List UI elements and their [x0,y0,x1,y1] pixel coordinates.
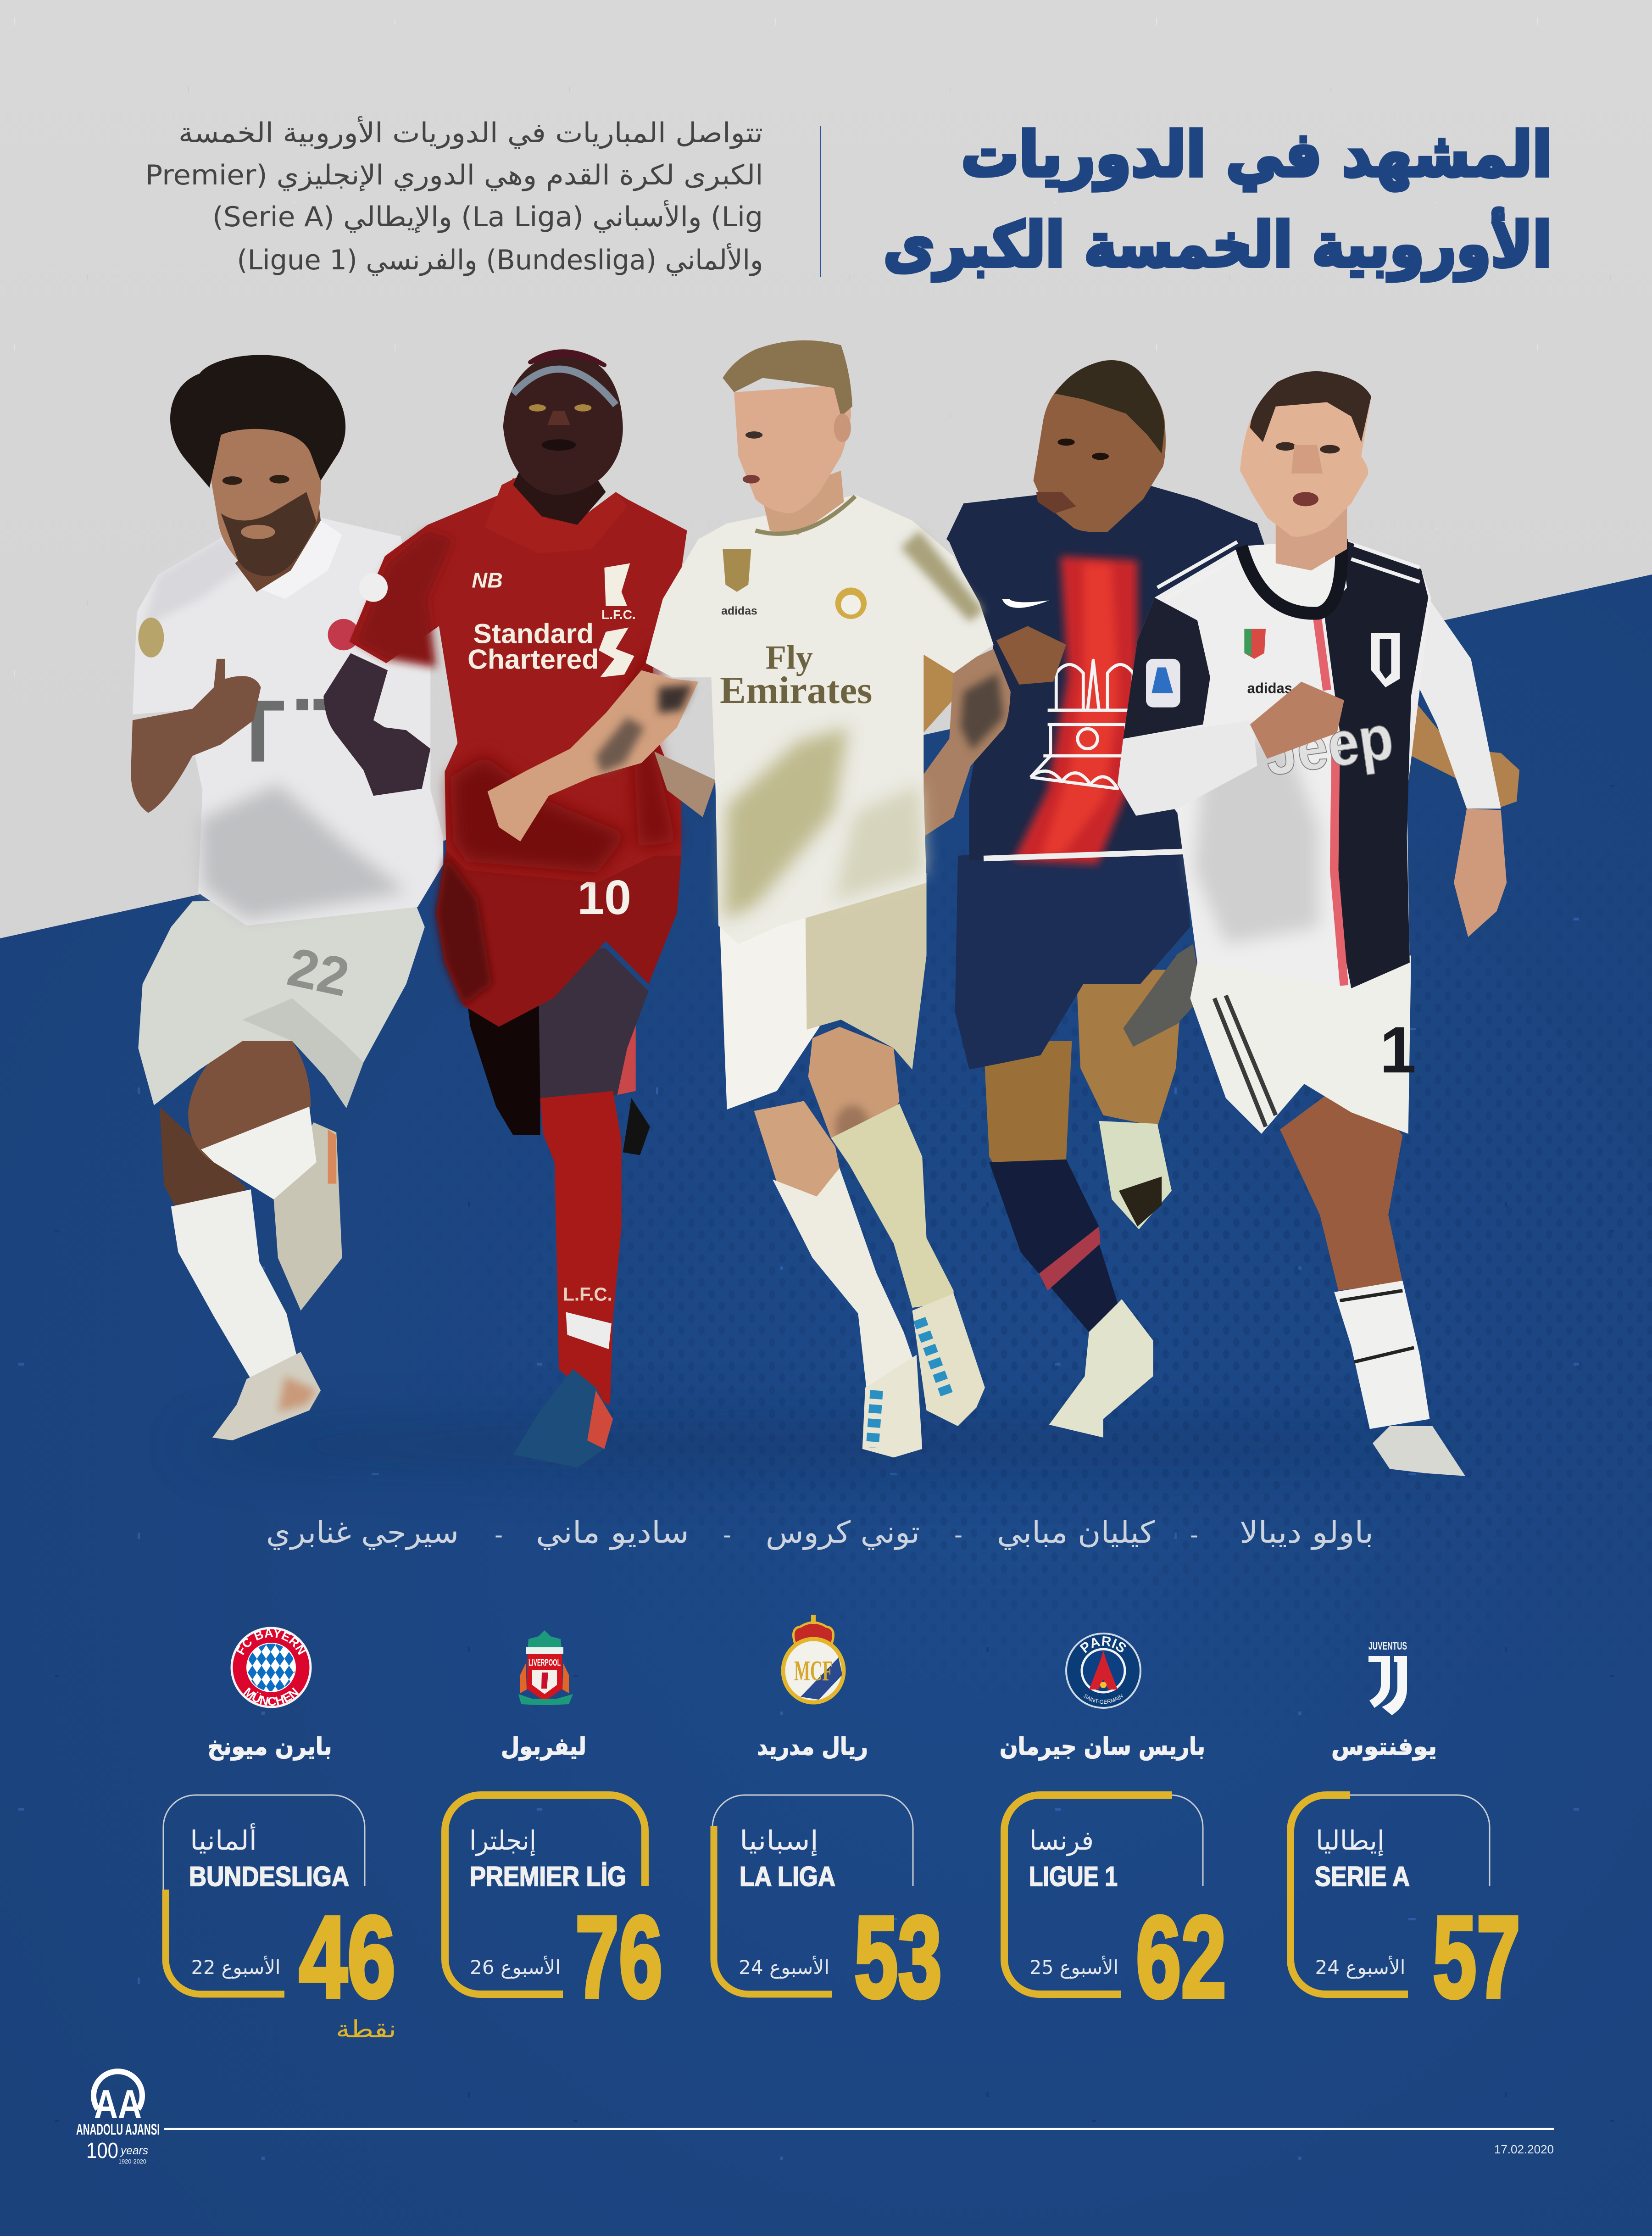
title [884,119,1552,281]
crest: Paris Saint-Germain: SAINT-GERMAIN [1082,1693,1124,1705]
player: Toni Kroos: Emirates [720,669,872,712]
card: La Liga: إسبانيا [740,1825,818,1857]
card: Premier League: PREMIER LİG [470,1861,626,1892]
club names: باريس سان جيرمان [1000,1733,1205,1761]
background: grey paper grain [0,0,1652,941]
player names [266,1515,1374,1550]
card: Bundesliga: 46 [299,1893,395,2022]
logo: Anadolu Agency [76,2069,160,2165]
card: Serie A: الأسبوع 24 [1315,1955,1406,1979]
title: المشهد في الدوريات [961,119,1552,191]
player: Toni Kroos: Fly [765,639,813,677]
club names: يوفنتوس [1331,1733,1437,1761]
player: Sadio Mane: Chartered [467,644,599,675]
intro text: Lig) والأسباني (La Liga) والإيطالي (Serie A) [212,200,763,233]
player: Paulo Dybala [1118,371,1507,1476]
club names: ليفربول [501,1733,586,1761]
card: La Liga: الأسبوع 24 [739,1955,829,1979]
player: Sadio Mane: 10 [577,870,631,925]
player: Serge Gnabry [131,355,443,1440]
club names: بايرن ميونخ [207,1733,332,1761]
player names: ساديو ماني [536,1515,689,1550]
card: Premier League: 76 [575,1893,662,2022]
crest: Bayern Munich: FC BAYERN [234,1626,309,1657]
player: Sadio Mane: L.F.C. [601,608,636,622]
club names: ريال مدريد [757,1733,868,1761]
player: Sadio Mane: NB [472,568,503,592]
player names: كيليان مبابي [997,1515,1155,1550]
card: Bundesliga [163,1795,396,2043]
crest: Juventus: JUVENTUS [1368,1640,1407,1652]
player names: - [1190,1522,1198,1548]
player: Sadio Mane: Standard [473,618,594,649]
player: Kylian Mbappe [919,360,1519,1438]
card: Ligue 1: LIGUE 1 [1029,1861,1118,1892]
card: Ligue 1 [1004,1795,1226,2022]
card: Bundesliga: ألمانيا [190,1823,257,1856]
crest: Bayern Munich [232,1626,311,1708]
player: Serge Gnabry: 22 [283,937,354,1008]
player: Paulo Dybala: Jeep [1261,701,1397,789]
player names: - [954,1522,962,1548]
player: Toni Kroos: adidas [721,605,757,618]
player group [131,340,1519,1476]
crest: Bayern Munich: MÜNCHEN [241,1685,301,1708]
title divider [820,126,821,277]
date: 17.02.2020 [1494,2142,1554,2156]
card: Ligue 1: فرنسا [1029,1825,1094,1857]
footer rule [164,2128,1554,2130]
card: La Liga: LA LIGA [740,1861,835,1892]
card: Bundesliga: BUNDESLIGA [189,1861,349,1892]
card: Premier League [445,1795,662,2022]
player names: باولو ديبالا [1240,1515,1374,1550]
crest: Juventus [1368,1640,1407,1715]
player names: - [495,1522,503,1548]
card: Premier League: إنجلترا [469,1825,536,1857]
card: Serie A [1290,1795,1520,2022]
player names: توني كروس [766,1515,920,1550]
card: Serie A: 57 [1433,1893,1520,2022]
logo: Anadolu Agency: AA [94,2081,142,2127]
player: Paulo Dybala: adidas [1247,680,1292,696]
player: Serge Gnabry: T [231,682,285,781]
card: Bundesliga: نقطة [336,2016,396,2043]
card: Bundesliga: الأسبوع 22 [191,1955,281,1979]
player: Paulo Dybala: 1 [1380,1014,1416,1087]
background: blue diagonal panel [0,574,1652,2236]
intro text: الكبرى لكرة القدم وهي الدوري الإنجليزي (Premier [145,159,763,191]
card: Ligue 1: 62 [1136,1893,1226,2022]
card: La Liga [712,1795,942,2022]
intro text [145,116,763,276]
card: Serie A: إيطاليا [1316,1825,1385,1857]
logo: Anadolu Agency: 100 [86,2139,118,2163]
player: Toni Kroos [488,340,1011,1457]
player names: - [723,1522,731,1548]
card: Ligue 1: الأسبوع 25 [1029,1955,1118,1979]
crest: Liverpool: LIVERPOOL [528,1658,561,1668]
card: Serie A: SERIE A [1315,1861,1410,1892]
crest: Liverpool [518,1630,573,1705]
card: La Liga: 53 [854,1893,942,2022]
logo: Anadolu Agency: years [120,2144,148,2157]
intro text: تتواصل المباريات في الدوريات الأوروبية الخمسة [178,116,763,149]
crest: Paris Saint-Germain [1066,1634,1140,1708]
player: Sadio Mane [323,351,687,1467]
logo: Anadolu Agency: ANADOLU AJANSI [76,2121,160,2138]
crest: Real Madrid [783,1615,844,1702]
crest: Real Madrid: MCF [794,1656,833,1687]
title: الأوروبية الخمسة الكبرى [884,208,1552,281]
intro text: والألماني (Bundesliga) والفرنسي (Ligue 1) [237,243,763,276]
ground shadow [184,1418,1468,1473]
crest: Paris Saint-Germain: PARIS [1078,1634,1129,1656]
player: Sadio Mane: L.F.C. [563,1283,612,1305]
player names: سيرجي غنابري [266,1515,459,1550]
card: Premier League: الأسبوع 26 [470,1955,561,1979]
logo: Anadolu Agency: 1920-2020 [118,2158,146,2165]
club names [207,1733,1437,1761]
